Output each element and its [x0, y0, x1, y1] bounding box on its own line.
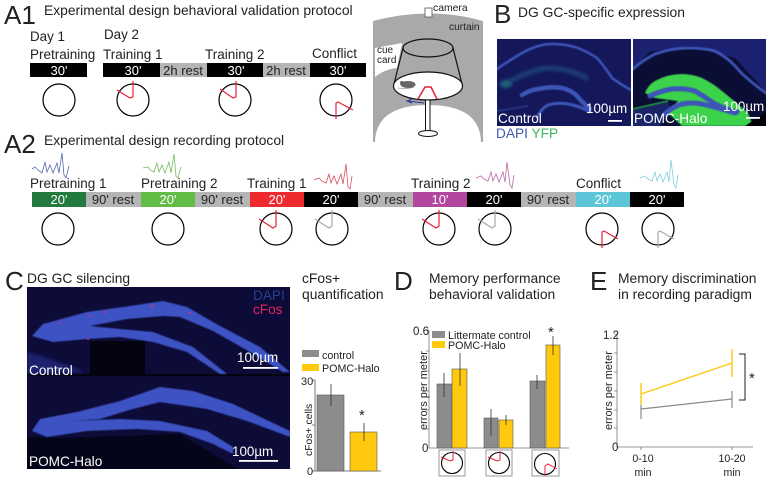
- axis labels: min: [723, 467, 741, 479]
- timeline A2: 20': [160, 192, 176, 207]
- axis labels: 10-20: [718, 453, 746, 465]
- title: A1 protocol: Experimental design behavioral validation protocol: [44, 2, 353, 18]
- maze icons A1: [43, 81, 353, 119]
- panel: B expression: [494, 0, 766, 141]
- timeline A1: [30, 63, 366, 78]
- session labels A2: Pretraining 2: [141, 176, 218, 191]
- timeline A2: 20': [595, 192, 611, 207]
- timeline A2: 20': [51, 192, 67, 207]
- day labels: [30, 27, 139, 44]
- axis labels: errors per meter: [418, 351, 430, 430]
- legend: DAPI YFP: DAPI YFP: [496, 126, 558, 141]
- heading: A1: A1: [4, 0, 36, 30]
- legend: [432, 330, 531, 352]
- session labels A2: Pretraining 1: [30, 176, 107, 191]
- panel: A1 behavioral protocol: [4, 0, 366, 119]
- axes: [614, 334, 753, 450]
- image labels C: Control: [29, 363, 73, 378]
- spike traces: [32, 153, 678, 189]
- legend: [302, 350, 380, 375]
- axis labels: 0: [422, 443, 428, 455]
- title: cFos quantification: quantification: [302, 286, 384, 302]
- axis labels: [413, 326, 430, 455]
- axis labels: 0-10: [632, 453, 654, 465]
- session labels: Pretraining: [30, 47, 95, 62]
- axis labels: 0: [307, 466, 313, 478]
- series: POMC-Halo: [641, 349, 732, 405]
- legend: POMC-Halo: [322, 363, 380, 375]
- micrograph: POMC-Halo: [633, 39, 766, 126]
- session labels A2: Conflict: [576, 176, 621, 191]
- heading: E: E: [590, 266, 607, 296]
- title: B: DG GC-specific expression: [518, 4, 685, 20]
- timeline A2: 10': [432, 192, 448, 207]
- stand: [418, 100, 438, 136]
- significance: *: [749, 370, 755, 387]
- image labels B: 100µm: [586, 101, 627, 116]
- label: camera: camera: [433, 3, 468, 14]
- micrograph: control: [497, 39, 631, 126]
- blue arrow: [407, 99, 424, 103]
- error bars: [444, 336, 553, 436]
- session labels: Conflict: [312, 46, 357, 61]
- session labels A2: Training 2: [411, 176, 471, 191]
- timeline A1: 30': [51, 63, 67, 78]
- axis labels: 0: [612, 442, 618, 454]
- significance: *: [548, 324, 554, 341]
- timeline A2: 90' rest: [92, 192, 134, 207]
- line chart: errors per meter: [603, 330, 755, 479]
- panel: apparatus diagram: [373, 3, 483, 142]
- label: cue card: card: [377, 55, 396, 66]
- timeline A2: 20': [486, 192, 502, 207]
- day labels: Day 1: [30, 29, 65, 44]
- bars: [437, 345, 560, 448]
- timeline A1: 30': [125, 63, 141, 78]
- series: control: [641, 391, 732, 419]
- significance bracket: [739, 354, 745, 400]
- title: E: in recording paradigm: [618, 286, 752, 302]
- axis labels: 0.6: [413, 326, 429, 338]
- heading: D: D: [394, 266, 413, 296]
- title: A2 protocol: Experimental design recording protocol: [44, 132, 284, 148]
- image labels C: POMC-Halo: [29, 454, 102, 469]
- timeline A2: [32, 192, 684, 207]
- bar chart: cFos+ cells: [301, 350, 381, 478]
- image labels C: [29, 288, 285, 469]
- title: C: DG GC silencing: [27, 270, 130, 286]
- image labels B: POMC-Halo: [634, 111, 707, 126]
- session labels A2: Training 1: [247, 176, 307, 191]
- axes: [426, 330, 569, 448]
- timeline A2: 90' rest: [364, 192, 406, 207]
- maze icons A2: [42, 210, 674, 248]
- curtain: [373, 14, 483, 142]
- session labels A2: [30, 176, 621, 191]
- significance: *: [359, 407, 365, 424]
- image labels C: DAPI: [253, 288, 285, 303]
- panel: A2 recording protocol: [4, 129, 684, 248]
- title: cFos quantification: cFos+: [302, 270, 340, 286]
- label: cue card: cue: [377, 45, 393, 56]
- image labels B: [498, 99, 764, 126]
- timeline A2: 90' rest: [527, 192, 569, 207]
- title: D: behavioral validation: [429, 286, 555, 302]
- title: E: Memory discrimination: [618, 270, 756, 286]
- axis labels: min: [634, 467, 652, 479]
- panel: C silencing: [5, 266, 384, 478]
- image labels B: Control: [498, 111, 542, 126]
- timeline A1: 2h rest: [266, 63, 306, 78]
- image labels B: 100µm: [723, 99, 764, 114]
- axis labels: 30: [301, 376, 313, 388]
- cue card: [375, 43, 402, 77]
- session labels: Training 2: [205, 47, 265, 62]
- maze platform and walls: [394, 39, 462, 100]
- label: curtain: curtain: [449, 22, 480, 33]
- scale bars C: [239, 367, 278, 462]
- timeline A2: 20': [269, 192, 285, 207]
- session labels: [30, 46, 357, 62]
- axis labels: errors per meter: [603, 351, 615, 430]
- image labels C: 100µm: [232, 444, 273, 459]
- red zone: [418, 87, 437, 99]
- axis labels: [301, 376, 315, 478]
- legend: control: [322, 350, 354, 362]
- mouse icon: [398, 81, 416, 88]
- heading: C: C: [5, 266, 24, 296]
- day labels: Day 2: [104, 27, 139, 42]
- axis labels: [603, 330, 746, 479]
- image labels C: 100µm: [237, 350, 278, 365]
- axes: [312, 380, 381, 471]
- axis labels: 1.2: [603, 330, 619, 342]
- title: D: Memory performance: [429, 270, 561, 286]
- camera icon: [425, 8, 432, 17]
- panel: E memory discrimination: [590, 266, 756, 479]
- bar chart: errors per meter: [413, 324, 569, 476]
- timeline A1: 2h rest: [163, 63, 203, 78]
- error bars: [331, 384, 364, 441]
- timeline A2: 90' rest: [201, 192, 243, 207]
- legend: POMC-Halo: [448, 340, 506, 352]
- timeline A2: 20': [649, 192, 665, 207]
- micrograph: DG silencing: [27, 287, 290, 470]
- scale bars B: [608, 117, 760, 122]
- bars: [317, 395, 344, 471]
- timeline A1: 30': [228, 63, 244, 78]
- axis labels: cFos+ cells: [304, 404, 315, 456]
- image labels C: cFos: [253, 302, 283, 317]
- timeline A1: 30': [330, 63, 346, 78]
- legend: Littermate control: [448, 330, 531, 342]
- timeline A2: 20': [323, 192, 339, 207]
- session labels: Training 1: [103, 47, 163, 62]
- condition icons: [439, 450, 559, 476]
- panel: D memory performance: [394, 266, 569, 476]
- heading: A2: A2: [4, 129, 36, 159]
